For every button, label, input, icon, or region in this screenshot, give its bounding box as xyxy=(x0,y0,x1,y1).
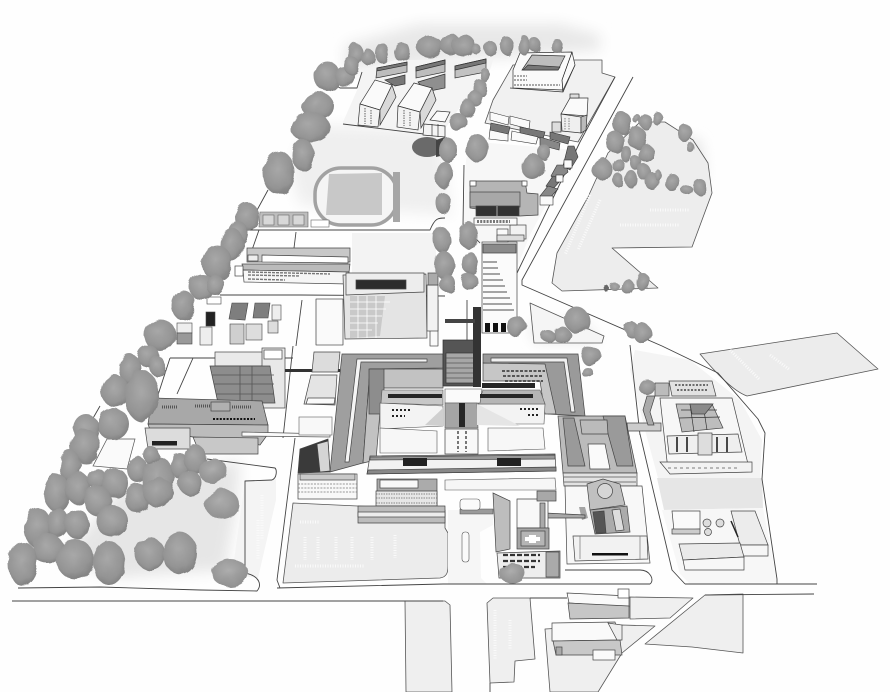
lot: west middle xyxy=(352,233,437,273)
long teaching buildings xyxy=(235,248,350,284)
hospital block with helipad xyxy=(493,491,560,578)
lot: south west parking xyxy=(283,503,448,583)
row houses xyxy=(489,112,578,205)
east medical centre xyxy=(643,381,752,474)
small building left of ring xyxy=(299,352,340,435)
white corridor to main complex xyxy=(242,432,330,437)
central slab building xyxy=(343,273,438,339)
lot: east hospital xyxy=(630,350,762,480)
south-east utility buildings xyxy=(672,511,768,570)
south entrance strip xyxy=(445,478,556,562)
lot: south 3 xyxy=(630,597,693,619)
parking bay marks xyxy=(258,195,790,660)
gymnasium building xyxy=(470,181,538,225)
trees xyxy=(8,33,707,586)
main complex: windows row north wing xyxy=(502,371,545,381)
light trees xyxy=(199,458,525,587)
lot: central field xyxy=(463,143,575,272)
east cluster xyxy=(612,112,632,134)
north courtyard building xyxy=(510,52,575,92)
main complex: outer grey ring right xyxy=(483,354,585,416)
lot: south middle road xyxy=(448,510,493,584)
west complex: tower and stacked floors xyxy=(210,348,340,408)
east wing of main complex xyxy=(558,416,661,486)
top row xyxy=(349,43,363,67)
lot: south 2 xyxy=(487,598,535,683)
lot: triangle with trees xyxy=(530,303,604,343)
main complex: courtyards xyxy=(380,389,545,453)
east tower with low block xyxy=(482,225,526,333)
main complex: central white block xyxy=(445,429,478,454)
southwest wing with dark facade xyxy=(298,439,357,499)
tree shadow near residential xyxy=(412,137,442,157)
lot: west parking xyxy=(232,479,276,578)
tennis courts xyxy=(259,212,308,227)
main complex: outer grey ring left xyxy=(330,354,443,472)
west white lot xyxy=(93,439,135,469)
south road buildings xyxy=(552,589,629,660)
main complex: central north stair block xyxy=(443,307,481,387)
west complex: long grey hall xyxy=(145,398,268,454)
north-west edge xyxy=(314,61,340,91)
lot: residential xyxy=(343,60,493,136)
lot: lower east band xyxy=(657,478,763,510)
west cluster xyxy=(137,345,159,367)
lot: north-east field xyxy=(700,333,878,396)
lot: south east utility xyxy=(662,508,777,584)
athletic track xyxy=(311,168,400,227)
lot: large east parking xyxy=(552,122,712,291)
main complex: south band xyxy=(367,454,556,474)
main complex: dark roof strips xyxy=(388,383,535,427)
south central entrance building xyxy=(358,479,445,523)
watercolor ground washes xyxy=(60,24,705,578)
lot: south 4 xyxy=(545,625,655,692)
lot: south 1 xyxy=(405,601,452,692)
ground lots and parking xyxy=(232,60,878,692)
central avenue xyxy=(480,68,490,82)
lot: north block xyxy=(485,60,615,142)
dome building xyxy=(545,479,650,564)
lot: south 5 xyxy=(645,594,743,653)
residential blocks xyxy=(358,59,486,137)
west small buildings xyxy=(177,297,281,345)
small tower near north block xyxy=(552,94,588,133)
